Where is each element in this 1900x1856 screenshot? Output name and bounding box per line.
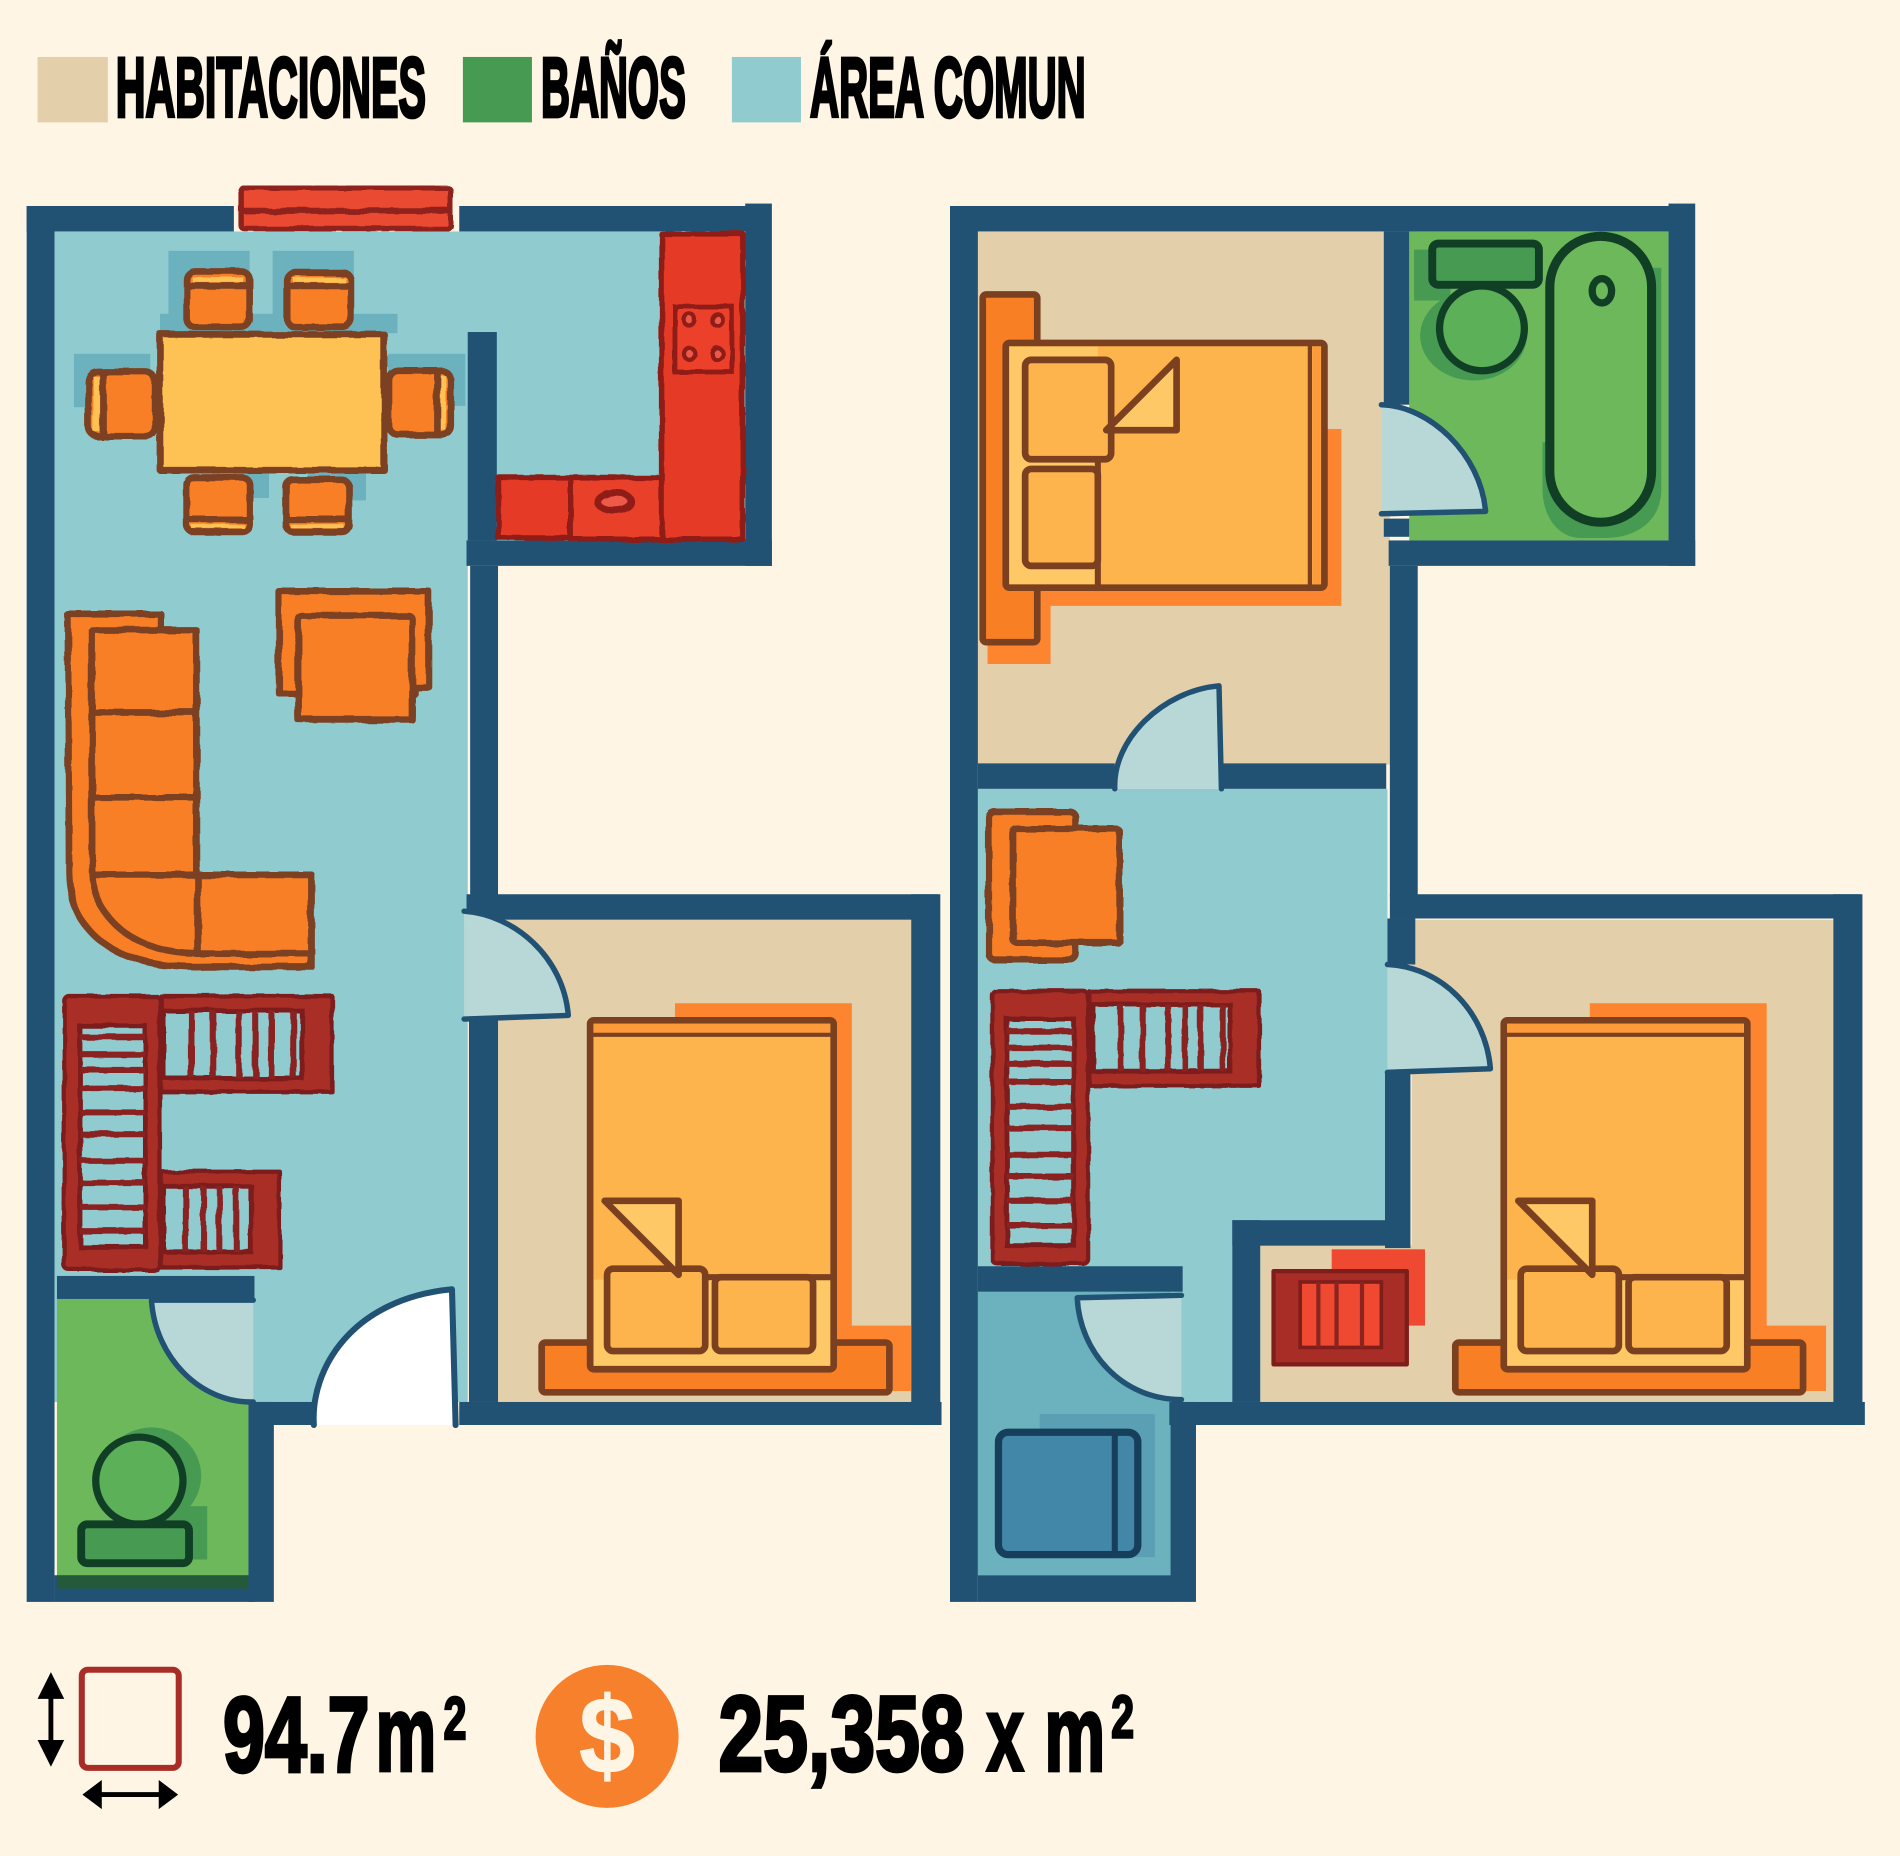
pillows bbox=[1521, 1269, 1619, 1351]
mattress bbox=[1006, 343, 1324, 588]
bookshelf bbox=[992, 991, 1259, 1264]
toilet bbox=[1414, 244, 1539, 380]
floor plan: right unit bbox=[950, 204, 1865, 1602]
price value: 25,358 bbox=[719, 1673, 965, 1793]
text: ÁREA COMUN bbox=[810, 39, 1086, 134]
pillows bbox=[1025, 360, 1111, 459]
upper bedroom floor bbox=[978, 231, 1390, 765]
price value: x bbox=[986, 1673, 1024, 1793]
legend swatch: área común bbox=[732, 57, 801, 122]
lower bathroom floor bbox=[978, 1292, 1171, 1575]
bedroom door bbox=[1115, 686, 1221, 789]
vertical arrow bbox=[38, 1672, 64, 1767]
headboard bbox=[542, 1343, 889, 1392]
headboard bbox=[1455, 1343, 1803, 1392]
sheet fold bbox=[605, 1201, 679, 1275]
dining chairs bbox=[88, 271, 451, 532]
stove bbox=[675, 307, 732, 372]
bathroom floor bbox=[57, 1299, 248, 1575]
closet furniture bbox=[1274, 1249, 1425, 1364]
toilet bbox=[81, 1427, 207, 1563]
bedroom door bbox=[464, 911, 568, 1019]
window bbox=[241, 188, 451, 229]
legend swatch: habitaciones bbox=[38, 57, 108, 122]
horizontal arrow bbox=[82, 1780, 178, 1809]
price value: m bbox=[1045, 1673, 1105, 1793]
floor plan: left unit bbox=[27, 188, 942, 1602]
legend: BAÑOS bbox=[541, 39, 686, 134]
area value: 94.7 bbox=[223, 1675, 370, 1795]
bathroom door bbox=[151, 1300, 253, 1402]
price value: 2 bbox=[1111, 1683, 1134, 1751]
upper bathroom floor bbox=[1409, 231, 1669, 540]
common area floor bbox=[55, 231, 745, 1402]
upper bedroom bed bbox=[983, 294, 1341, 664]
bed shadow bbox=[1590, 1003, 1826, 1391]
sheet fold bbox=[1106, 360, 1177, 430]
dining table bbox=[160, 334, 384, 470]
lower bedroom floor bbox=[1260, 920, 1833, 1402]
chair shadows bbox=[74, 251, 465, 500]
armchair bbox=[279, 591, 429, 720]
area value: 2 bbox=[443, 1684, 467, 1752]
bed shadow bbox=[675, 1003, 911, 1391]
bathroom door bbox=[1381, 405, 1486, 514]
kitchen counter bbox=[498, 234, 743, 539]
legend: HABITACIONES bbox=[116, 39, 426, 134]
price icon: dollar coin bbox=[536, 1665, 679, 1808]
lower bedroom bed bbox=[1455, 1003, 1826, 1392]
area value: m bbox=[376, 1673, 436, 1793]
lower bathroom door bbox=[1077, 1295, 1181, 1400]
walls bbox=[27, 204, 942, 1602]
bedroom bed bbox=[542, 1003, 911, 1392]
legend swatch: baños bbox=[463, 57, 532, 122]
bed shadow bbox=[988, 429, 1341, 664]
entrance door bbox=[314, 1289, 456, 1425]
washer bbox=[998, 1414, 1155, 1557]
bedroom floor bbox=[497, 920, 911, 1402]
sheet fold bbox=[1518, 1201, 1592, 1275]
walls bbox=[950, 204, 1865, 1602]
square outline bbox=[82, 1670, 179, 1768]
mattress bbox=[1504, 1020, 1747, 1369]
sink bbox=[597, 493, 631, 511]
bookshelf bbox=[64, 996, 332, 1270]
pillows bbox=[607, 1269, 705, 1351]
armchair bbox=[989, 812, 1120, 960]
area icon bbox=[38, 1670, 179, 1809]
bathtub bbox=[1543, 236, 1661, 538]
headboard bbox=[983, 294, 1037, 642]
mattress bbox=[590, 1020, 834, 1369]
common area floor bbox=[978, 789, 1387, 1402]
price icon: dollar coin: $ bbox=[579, 1675, 635, 1797]
L-shaped sofa bbox=[68, 614, 311, 967]
lower bedroom door bbox=[1387, 965, 1490, 1072]
legend bbox=[38, 39, 1086, 134]
